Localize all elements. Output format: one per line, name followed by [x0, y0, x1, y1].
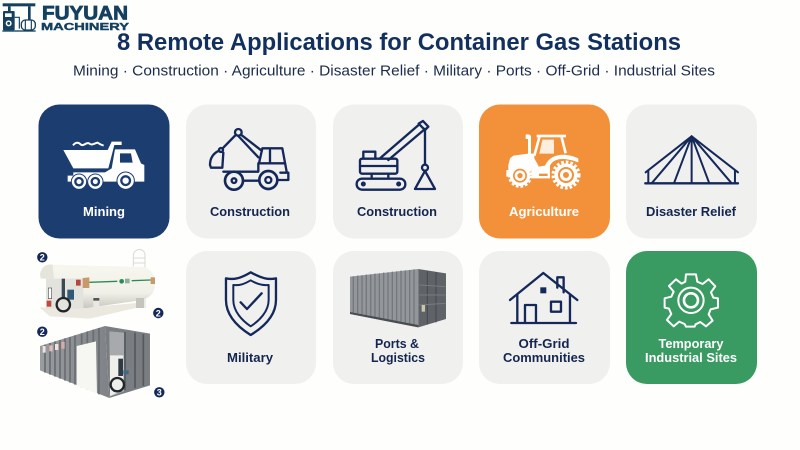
icon: dump truck	[63, 142, 144, 189]
icon: shield with check	[226, 272, 276, 335]
logo icon: fuel pump and tank	[2, 3, 36, 32]
panel: construction excavator	[186, 104, 316, 238]
panel: mining	[38, 104, 170, 238]
icon: house	[510, 273, 577, 323]
badge 2: 2	[40, 327, 45, 337]
product photos: storage tank station and container station	[37, 249, 164, 398]
label: Disaster Relief	[646, 204, 737, 219]
label: Construction	[357, 204, 437, 219]
badge 3: 3	[157, 388, 162, 398]
logo wordmark FUYUAN: FUYUAN	[42, 3, 128, 24]
panel: construction crane	[333, 104, 463, 238]
panel: temporary industrial sites	[626, 251, 757, 384]
badge 3	[154, 387, 164, 398]
image: shipping container	[350, 269, 446, 327]
label: Construction	[210, 204, 290, 219]
panel: ports and logistics	[333, 251, 463, 384]
icon: relief tent	[645, 136, 738, 183]
icon: tractor	[506, 134, 579, 188]
label: Temporary	[658, 336, 724, 351]
label: Agriculture	[509, 204, 579, 219]
logo wordmark MACHINERY: MACHINERY	[41, 22, 129, 33]
icon: crawler crane	[357, 121, 435, 190]
panel: off-grid communities	[479, 251, 610, 384]
panel: disaster relief	[626, 104, 757, 238]
icon: gear	[665, 274, 718, 327]
label	[371, 336, 425, 365]
label: Off-Grid	[518, 336, 570, 351]
label: Mining	[83, 204, 125, 219]
label	[503, 336, 585, 365]
image: grey container fuel station	[40, 326, 150, 398]
label: Communities	[503, 350, 585, 365]
panel: agriculture	[479, 104, 610, 238]
label: Industrial Sites	[645, 350, 737, 365]
panel: military	[186, 251, 316, 384]
icon: excavator	[210, 129, 288, 190]
label	[645, 336, 737, 365]
logo: Fuyuan Machinery	[2, 3, 129, 33]
subtitle: Mining · Construction · Agriculture · Disaster Relief · Military · Ports · Off-Grid · Industrial Sites	[73, 64, 715, 80]
badge 2: 2	[40, 253, 45, 263]
badge 2: 2	[156, 308, 161, 318]
label: Military	[227, 350, 274, 365]
image: white fuel tank station	[39, 249, 155, 319]
label: Logistics	[371, 350, 425, 365]
badge 2	[153, 308, 164, 318]
badge 2	[37, 326, 48, 337]
label: Ports &	[375, 336, 419, 351]
badge 2	[37, 252, 48, 263]
title: 8 Remote Applications for Container Gas Stations	[117, 29, 681, 56]
